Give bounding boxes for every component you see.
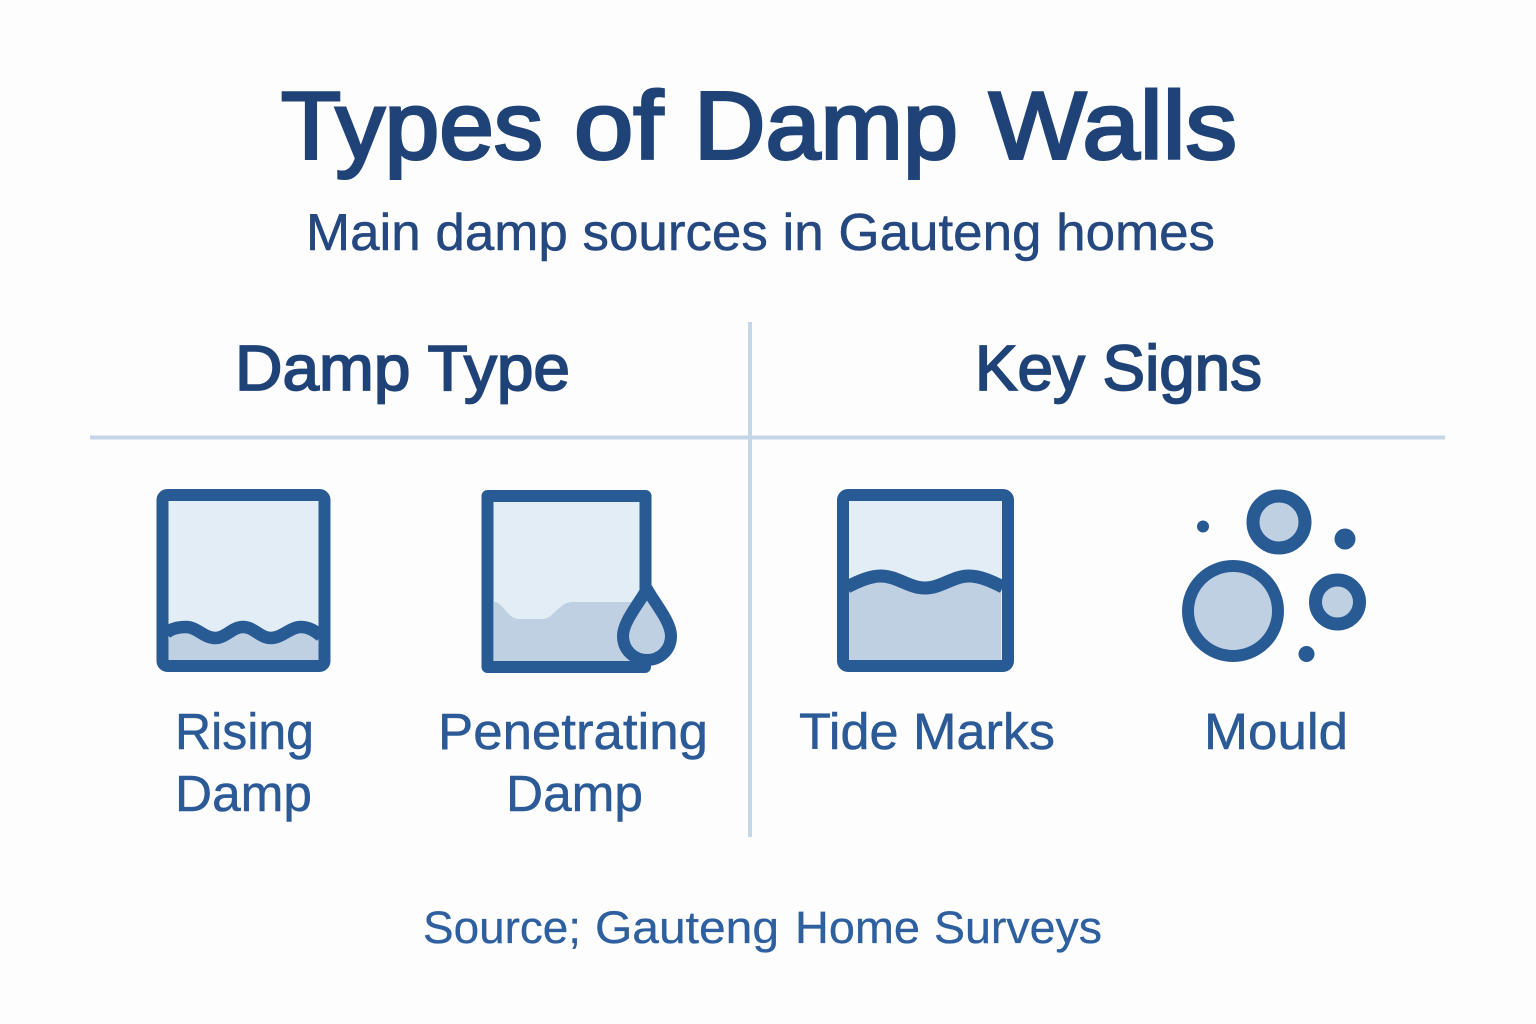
subtitle: Main damp sources in Gauteng homes	[306, 204, 1215, 262]
source note: Home	[795, 902, 920, 953]
icon: tide marks	[843, 495, 1008, 666]
icon: rising damp	[162, 495, 324, 666]
label: rising damp: Rising	[175, 703, 314, 760]
title: Walls	[989, 72, 1237, 180]
label: rising damp, second line: Damp	[175, 765, 312, 822]
icon: mould	[1188, 496, 1360, 662]
title: of	[574, 72, 663, 180]
label: tide marks: Tide Marks	[799, 703, 1055, 760]
source note: Gauteng	[595, 902, 779, 953]
label: penetrating damp: Penetrating	[438, 703, 708, 760]
column heading: damp type: Damp Type	[235, 332, 570, 404]
title: Damp	[694, 72, 958, 180]
source note: Surveys	[934, 902, 1102, 953]
title: Types	[281, 72, 543, 180]
icon: penetrating damp	[488, 496, 671, 667]
source note: Source;	[423, 902, 581, 953]
label: penetrating damp, second line: Damp	[506, 765, 643, 822]
column heading: key signs: Key Signs	[975, 332, 1262, 404]
label: mould: Mould	[1204, 703, 1348, 760]
